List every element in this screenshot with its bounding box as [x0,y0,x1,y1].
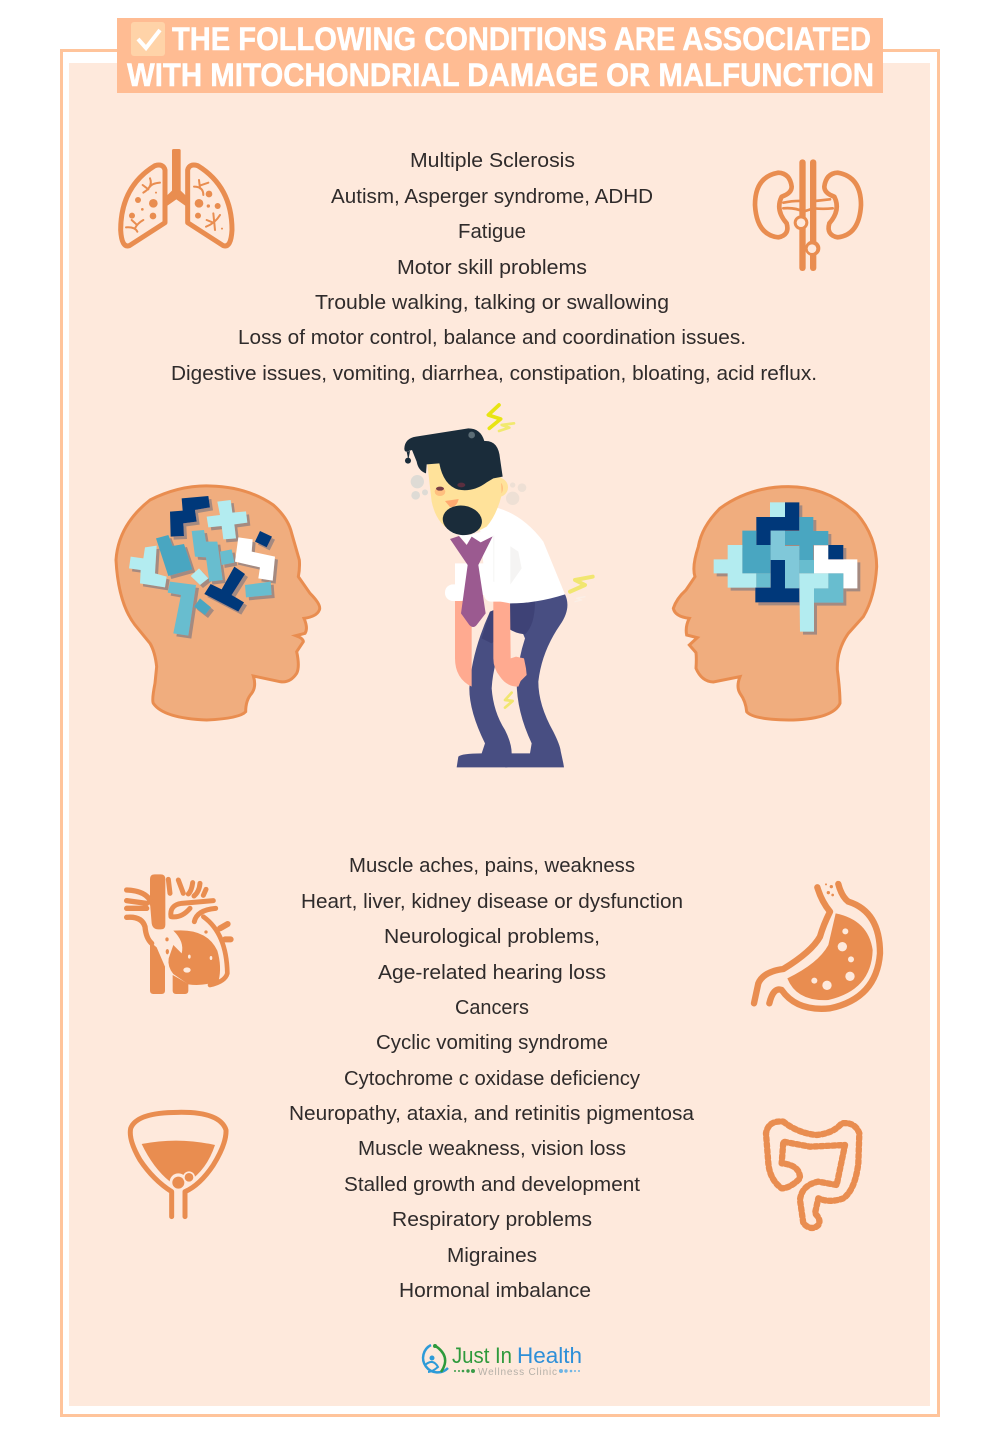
text block: lower conditions: Neuropathy, ataxia, and retinitis pigmentosa [289,1103,695,1125]
text block: lower conditions: Respiratory problems [392,1209,592,1231]
illustration: head with scattered puzzle pieces [116,486,320,720]
figure: facial details [435,487,459,507]
figure: sweat puffs [411,475,526,505]
icon: lightning bolts [488,405,593,708]
text block: lower conditions: Muscle aches, pains, weakness [349,855,635,877]
text block: lower conditions: Muscle weakness, vision loss [358,1138,626,1160]
icon: heart [127,874,231,994]
figure: ear [489,478,508,497]
text block: lower conditions: Neurological problems, [384,926,600,948]
title banner [117,18,883,93]
text block: lower conditions: Hormonal imbalance [399,1280,591,1302]
icon: intestine [766,1121,859,1228]
text block: lower conditions: Cancers [455,997,529,1019]
title banner: THE FOLLOWING CONDITIONS ARE ASSOCIATED [172,21,871,57]
logo emblem [423,1344,448,1372]
figure: legs [457,594,567,767]
icon: lungs [121,149,232,246]
logo: Just In Health Wellness Clinic: Health [517,1343,582,1368]
text block: lower conditions: Cytochrome c oxidase deficiency [344,1068,640,1090]
text block: upper conditions: Multiple Sclerosis [410,150,575,172]
figure: hair [404,428,503,490]
text block: lower conditions: Cyclic vomiting syndrome [376,1032,608,1054]
text block: lower conditions [289,855,695,1302]
text block: lower conditions: Heart, liver, kidney disease or dysfunction [301,891,683,913]
text block: upper conditions: Autism, Asperger syndrome, ADHD [331,186,653,208]
icon: kidneys [755,159,861,271]
text block: upper conditions: Trouble walking, talking or swallowing [315,292,669,314]
illustration: head with assembled puzzle pieces [673,487,877,720]
logo: Just In Health Wellness Clinic [423,1343,582,1378]
text block: upper conditions: Motor skill problems [397,257,587,279]
text block: upper conditions: Loss of motor control, balance and coordination issues. [238,327,746,349]
icon: bladder [130,1112,226,1217]
illustration: tired man [404,405,593,767]
icon: stomach [754,883,880,1009]
logo: Just In Health Wellness Clinic: Just In [452,1343,512,1368]
logo: Just In Health Wellness Clinic: Wellness Clinic [478,1367,557,1378]
text block: upper conditions: Digestive issues, vomiting, diarrhea, constipation, bloating, acid reflux. [171,363,817,385]
figure: face [427,458,502,533]
figure: necktie [450,536,493,627]
figure: arms [455,598,527,687]
content panel [69,63,930,1406]
figure: shirt [445,508,565,603]
title banner: WITH MITOCHONDRIAL DAMAGE OR MALFUNCTION [127,57,874,93]
text block: lower conditions: Migraines [447,1245,537,1267]
figure: beard [441,503,484,538]
text block: lower conditions: Age-related hearing loss [378,962,606,984]
text block: upper conditions: Fatigue [458,221,526,243]
text block: lower conditions: Stalled growth and development [344,1174,640,1196]
text block: upper conditions [171,150,817,385]
